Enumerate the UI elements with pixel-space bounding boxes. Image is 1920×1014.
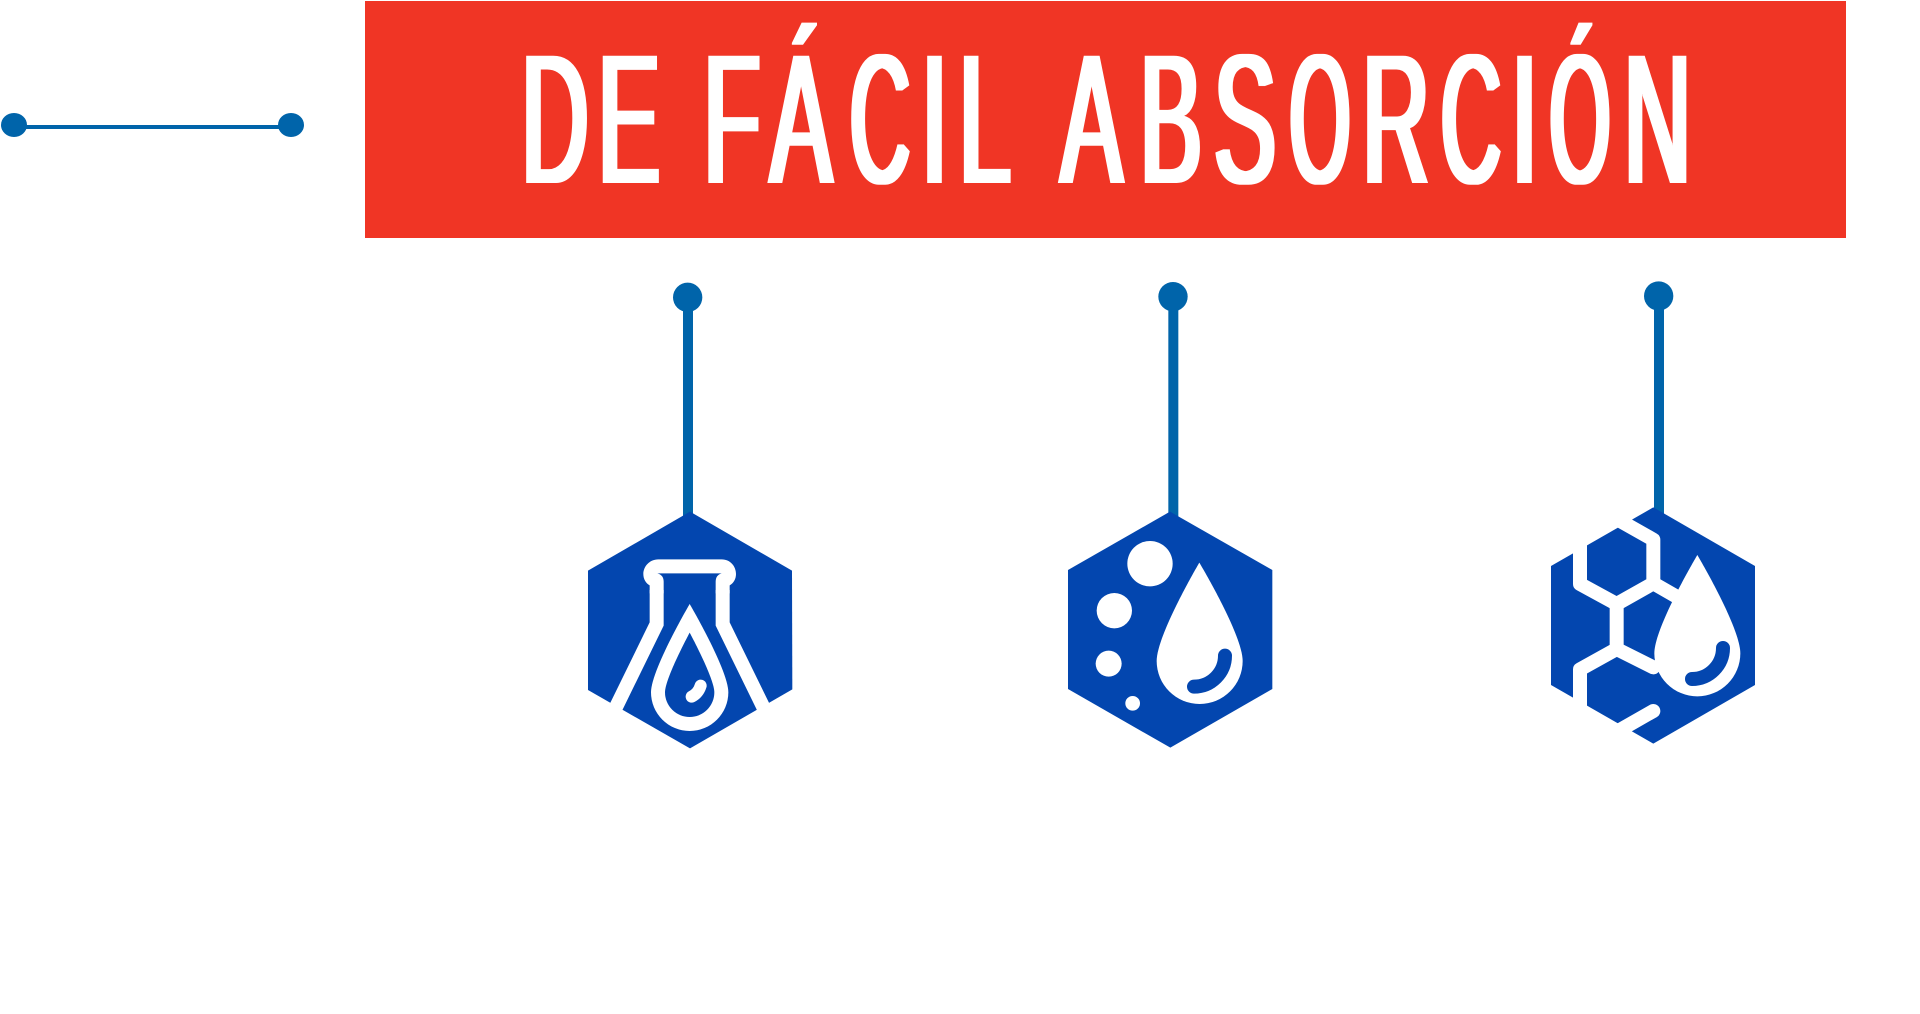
title text: I <box>1512 16 1537 222</box>
title text: C <box>850 16 910 222</box>
icon 2: drop with bubbles hanging from pin <box>1068 282 1272 748</box>
hexagon <box>588 512 792 748</box>
pin: dot and stem <box>1644 281 1673 518</box>
water drop <box>1654 555 1740 696</box>
title text: R <box>1363 16 1429 222</box>
hexagon <box>1551 507 1755 744</box>
title text: DE FÁ <box>522 16 832 222</box>
bubbles <box>1096 541 1173 711</box>
molecule network <box>1580 518 1677 730</box>
hexagon <box>1068 512 1272 748</box>
pin: dot and stem <box>673 283 702 517</box>
title banner <box>365 1 1846 238</box>
title text <box>522 16 1691 222</box>
connector: horizontal line with two dots <box>1 113 304 137</box>
title text: C <box>1441 16 1501 222</box>
flask outline <box>612 559 768 716</box>
title text: Ó <box>1550 16 1610 222</box>
pin: dot and stem <box>1158 282 1188 518</box>
icon 1: flask hanging from pin <box>588 283 792 748</box>
title text: IL ABS <box>922 16 1276 222</box>
title text: O <box>1290 16 1350 222</box>
drop inside flask <box>651 604 728 731</box>
title text: N <box>1624 16 1691 222</box>
icon 3: molecule and drop hanging from pin <box>1551 281 1755 744</box>
water drop <box>1157 563 1243 704</box>
